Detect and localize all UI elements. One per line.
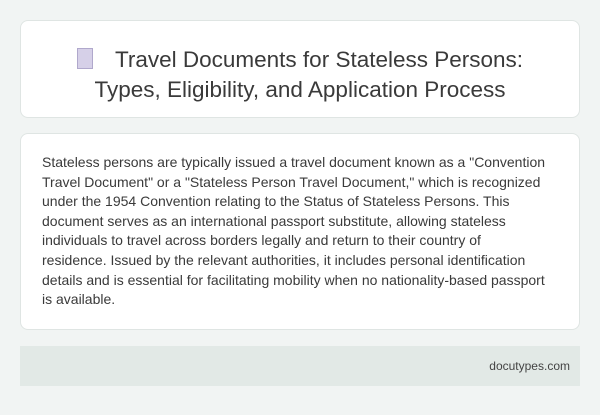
footer source: docutypes.com <box>489 359 570 373</box>
title: Travel Documents for Stateless Persons: <box>115 47 523 72</box>
icon: document scroll <box>77 48 93 69</box>
title: Types, Eligibility, and Application Process <box>94 77 506 102</box>
footer bar <box>20 346 580 386</box>
description text: Stateless persons are typically issued a travel document known as a "Convention Travel Document" or a "Stateless Person Travel Document," which is recognized under the 1954 Convention relating to the Status of Stateless Persons. This document serves as an international passport substitute, allowing stateless individuals to travel across borders legally and return to their country of residence. Issued by the relevant authorities, it includes personal identification details and is essential for facilitating mobility when no nationality-based passport is available. <box>42 154 545 307</box>
title card <box>20 20 580 118</box>
title <box>77 47 523 102</box>
description card <box>20 133 580 330</box>
